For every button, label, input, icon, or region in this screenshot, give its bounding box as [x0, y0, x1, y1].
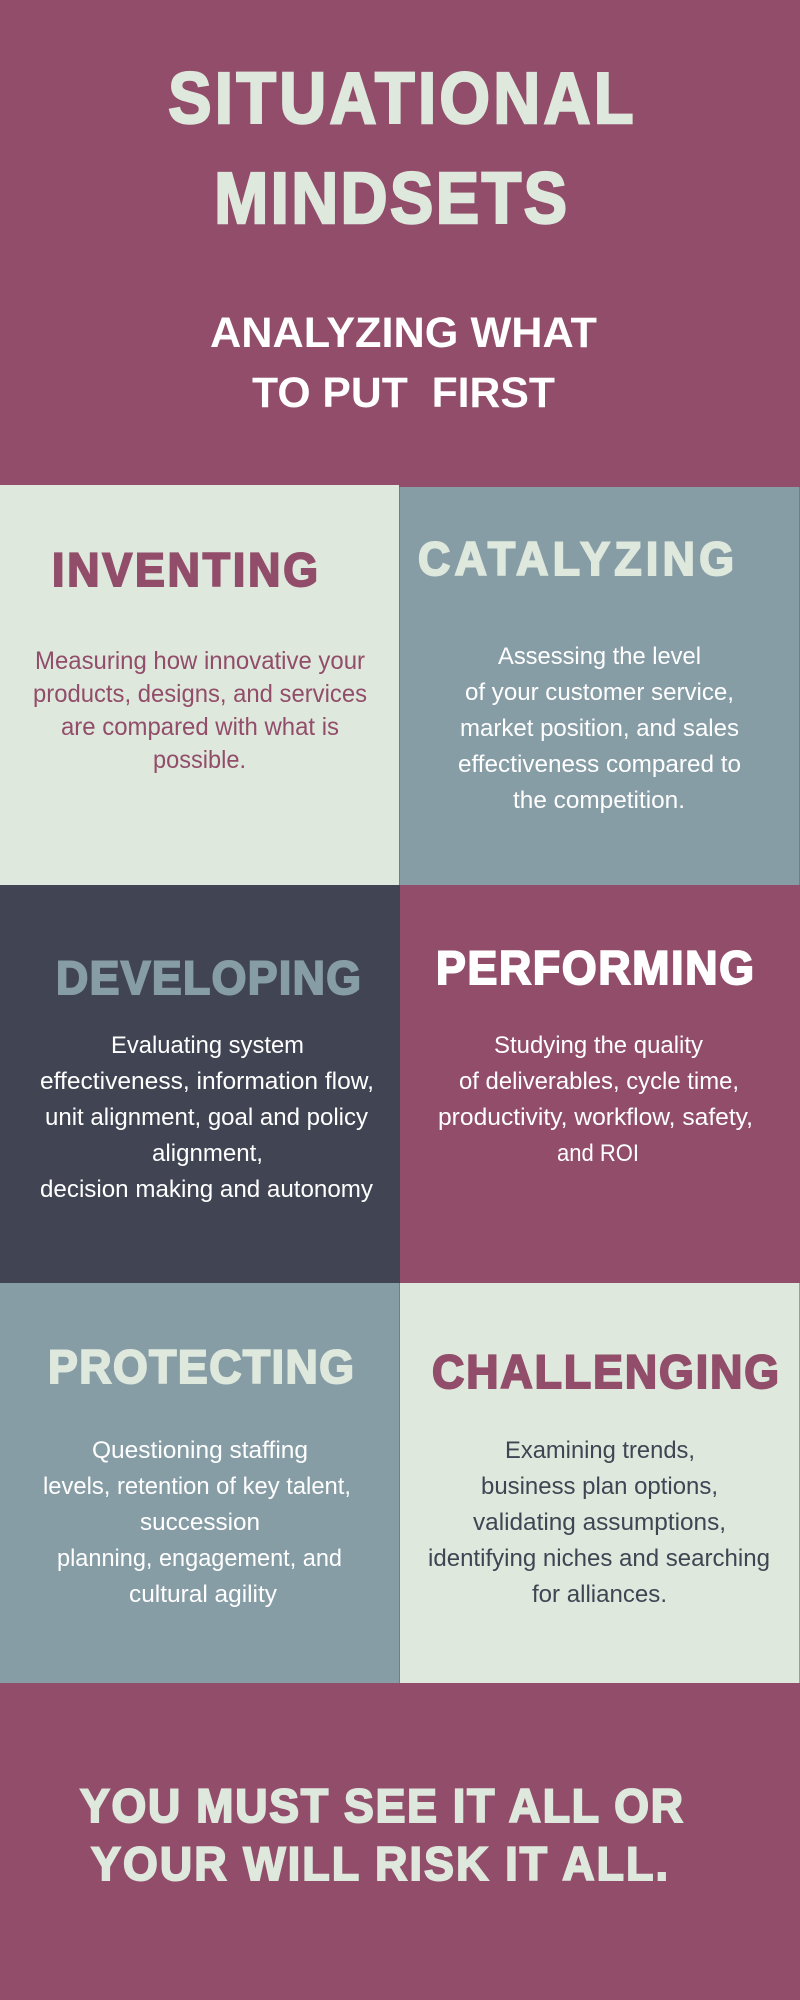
protecting heading: PROTECTING [48, 1341, 354, 1393]
closing message: YOUR WILL RISK IT ALL. [91, 1838, 668, 1890]
inventing description: are compared with what is [61, 713, 339, 741]
inventing heading: INVENTING [52, 544, 318, 596]
title: SITUATIONAL [168, 58, 634, 139]
developing description: Evaluating system [111, 1032, 304, 1059]
performing description: and ROI [557, 1140, 639, 1167]
catalyzing description: effectiveness compared to [458, 751, 741, 778]
developing background [0, 885, 400, 1283]
protecting background [0, 1283, 400, 1683]
catalyzing heading: CATALYZING [418, 533, 734, 585]
title [168, 58, 633, 239]
subtitle [210, 309, 597, 417]
challenging description: for alliances. [532, 1581, 667, 1608]
protecting description: cultural agility [129, 1581, 277, 1608]
developing description: effectiveness, information flow, [40, 1068, 374, 1095]
subtitle: ANALYZING WHAT [210, 309, 597, 357]
protecting description: Questioning staffing [92, 1437, 308, 1464]
performing background [400, 885, 800, 1283]
inventing description: products, designs, and services [33, 680, 367, 708]
catalyzing description: the competition. [513, 787, 685, 814]
inventing description: possible. [153, 746, 246, 774]
challenging background [400, 1283, 800, 1683]
panel: protecting [0, 1283, 400, 1683]
catalyzing description: of your customer service, [465, 679, 734, 706]
panel: performing [400, 885, 800, 1283]
panel: header [0, 0, 800, 487]
developing description [40, 1032, 374, 1203]
challenging description [428, 1437, 770, 1608]
panel: inventing [0, 485, 399, 885]
panel: catalyzing [399, 487, 800, 885]
title: MINDSETS [214, 158, 567, 239]
catalyzing description: Assessing the level [498, 643, 701, 670]
panel: challenging [400, 1283, 800, 1683]
inventing background [0, 485, 399, 885]
challenging description: business plan options, [481, 1473, 718, 1500]
subtitle: TO PUT FIRST [252, 369, 555, 417]
challenging description: validating assumptions, [473, 1509, 726, 1536]
protecting description: planning, engagement, and [57, 1545, 342, 1572]
inventing description: Measuring how innovative your [35, 647, 365, 675]
developing heading: DEVELOPING [56, 952, 361, 1004]
performing description: of deliverables, cycle time, [459, 1068, 739, 1095]
developing description: unit alignment, goal and policy [45, 1104, 368, 1131]
protecting description: levels, retention of key talent, [43, 1473, 351, 1500]
challenging heading: CHALLENGING [432, 1346, 779, 1398]
protecting description: succession [140, 1509, 260, 1536]
closing message: YOU MUST SEE IT ALL OR [80, 1780, 683, 1832]
challenging description: Examining trends, [505, 1437, 695, 1464]
catalyzing background [399, 487, 800, 885]
performing description: productivity, workflow, safety, [438, 1104, 753, 1131]
panel: developing [0, 885, 400, 1283]
panel: footer [0, 1683, 800, 2000]
header background [0, 0, 800, 487]
developing description: alignment, [152, 1140, 263, 1167]
performing description [438, 1032, 753, 1167]
performing description: Studying the quality [494, 1032, 703, 1059]
catalyzing description [458, 643, 741, 814]
developing description: decision making and autonomy [40, 1176, 373, 1203]
protecting description [43, 1437, 351, 1608]
catalyzing description: market position, and sales [460, 715, 739, 742]
footer background [0, 1683, 800, 2000]
performing heading: PERFORMING [436, 942, 754, 994]
closing message [80, 1780, 683, 1890]
inventing description [33, 647, 367, 774]
challenging description: identifying niches and searching [428, 1545, 770, 1572]
